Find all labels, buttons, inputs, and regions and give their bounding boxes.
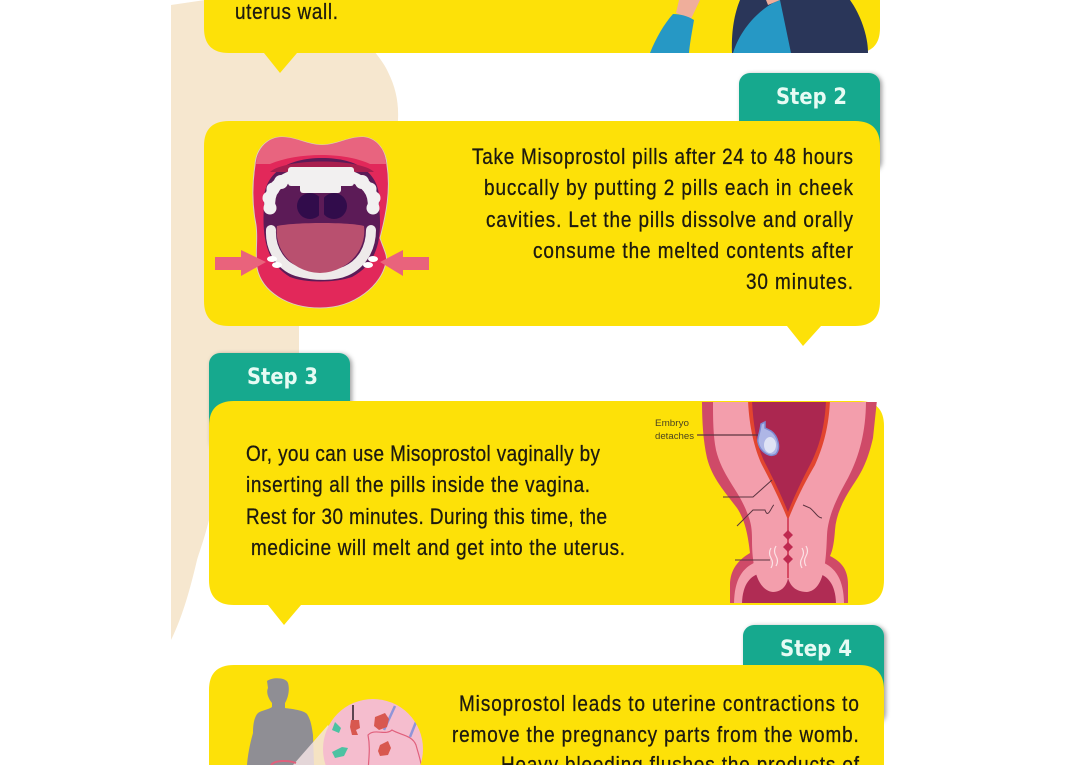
step 2 tab (739, 73, 880, 171)
step 4 text (452, 692, 859, 765)
step 4 text: Misoprostol leads to uterine contractions to (459, 692, 859, 716)
illustration: woman (650, 0, 868, 53)
step 2 tab: Step 2 (776, 85, 847, 110)
panel: step 1 (204, 0, 880, 73)
step 2 text: Take Misoprostol pills after 24 to 48 hours (472, 145, 853, 169)
step 3 tab: Step 3 (247, 365, 318, 390)
panel: step 3 (209, 353, 884, 625)
step 3 text: medicine will melt and get into the uterus. (251, 536, 625, 560)
illustration label: detaches (655, 431, 695, 441)
step 4 text: remove the pregnancy parts from the womb. (452, 723, 859, 747)
step 4 tab (743, 625, 884, 723)
arrow: left cheek (215, 250, 266, 276)
illustration label (655, 418, 695, 441)
step 2 text: cavities. Let the pills dissolve and orally (486, 208, 854, 232)
illustration: open mouth with pills (253, 137, 388, 308)
arrow: right cheek (380, 250, 429, 276)
panel: step 2 (204, 73, 880, 346)
step 2 text (472, 145, 854, 294)
step 2 card (204, 121, 880, 346)
step 3 text (246, 442, 625, 560)
step 4 tab: Step 4 (780, 637, 852, 662)
step 3 card (209, 401, 884, 625)
background beige silhouette (171, 0, 398, 640)
step 2 text: consume the melted contents after (533, 239, 853, 263)
step 3 text: inserting all the pills inside the vagina. (246, 473, 590, 497)
step 2 text: buccally by putting 2 pills each in cheek (484, 176, 854, 200)
step 1 card (204, 0, 880, 73)
step 2 text: 30 minutes. (746, 270, 853, 294)
illustration: uterus with detaching embryo (697, 400, 877, 605)
illustration: body with uterine tissue close-up (247, 678, 423, 765)
panel: step 4 (209, 625, 884, 765)
step 4 card (209, 665, 884, 765)
step 3 text: Rest for 30 minutes. During this time, the (246, 505, 607, 529)
step 3 text: Or, you can use Misoprostol vaginally by (246, 442, 601, 466)
step 3 tab (209, 353, 350, 451)
illustration label: Embryo (655, 418, 689, 428)
step 1 text: uterus wall. (235, 0, 338, 24)
